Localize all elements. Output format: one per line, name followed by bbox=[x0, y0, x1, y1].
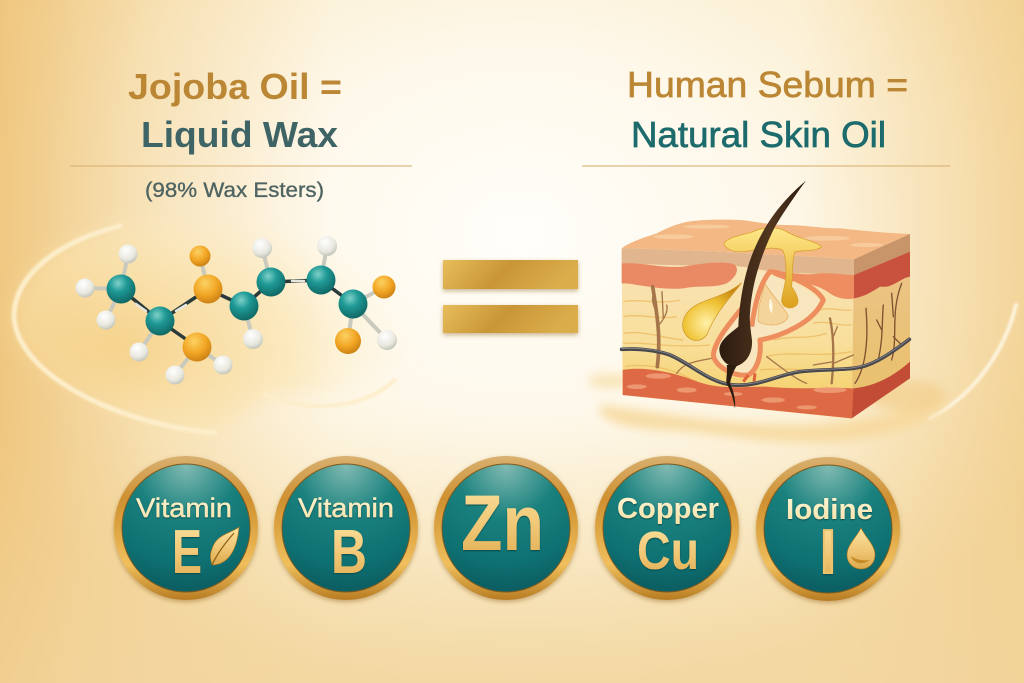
heading: Jojoba Oil: Jojoba Oil = bbox=[128, 66, 342, 107]
divider: left bbox=[70, 165, 412, 167]
epidermis band bbox=[622, 248, 854, 275]
badge: Iodine I bbox=[756, 457, 900, 601]
atoms: carbon bbox=[106, 266, 368, 336]
molecule diagram bbox=[76, 236, 397, 384]
oil puddle and drip bbox=[724, 228, 822, 308]
badge: Iodine I: I bbox=[820, 518, 836, 587]
nerve roots bbox=[653, 287, 853, 383]
heading: Human Sebum: Natural Skin Oil bbox=[631, 114, 886, 155]
red dermal layer right bbox=[770, 271, 854, 299]
subtitle: (98% Wax Esters) bbox=[145, 179, 324, 202]
red dermal layer left bbox=[622, 262, 737, 289]
hair root bbox=[726, 365, 737, 408]
divider: right bbox=[582, 165, 950, 167]
atoms: hydrogen bbox=[76, 236, 397, 384]
heading: Human Sebum: Human Sebum = bbox=[627, 64, 908, 105]
heading: Jojoba Oil bbox=[128, 66, 342, 155]
front face dermis bbox=[622, 248, 854, 418]
skin cross-section bbox=[622, 181, 910, 418]
follicle and oil duct bbox=[713, 270, 820, 375]
badge: Vitamin E: Vitamin bbox=[136, 493, 232, 523]
central gland bbox=[758, 283, 788, 325]
badge: Zn bbox=[434, 456, 578, 600]
lower red layer bbox=[623, 369, 853, 418]
icon: leaf bbox=[210, 527, 239, 565]
badge: Iodine I: Iodine bbox=[786, 494, 873, 526]
hair bbox=[719, 181, 806, 367]
badge: Vitamin E bbox=[114, 456, 258, 600]
swirl: left bbox=[14, 218, 415, 433]
dermis texture lines bbox=[623, 300, 852, 378]
right-face roots bbox=[855, 283, 902, 383]
badge: Vitamin B: Vitamin bbox=[298, 493, 394, 523]
badge: Vitamin E: E bbox=[172, 518, 202, 587]
oil splash under skin block bbox=[588, 374, 945, 442]
heading: Jojoba Oil: Liquid Wax bbox=[141, 114, 338, 155]
right face bbox=[852, 234, 910, 418]
swirl: right bbox=[930, 305, 1016, 418]
vessel line bbox=[622, 339, 909, 385]
atoms: oxygen bbox=[182, 246, 396, 362]
badge: Copper Cu: Copper bbox=[617, 493, 719, 525]
icon: oil drop bbox=[847, 528, 875, 569]
sebaceous gland left bbox=[683, 283, 742, 341]
badge: Copper Cu: Cu bbox=[637, 521, 699, 581]
badge: Zn: Zn bbox=[461, 478, 544, 567]
heading: Human Sebum bbox=[627, 64, 908, 155]
equals sign bbox=[443, 260, 578, 333]
badge: Vitamin B bbox=[274, 456, 418, 600]
top surface bbox=[622, 220, 910, 259]
badge: Vitamin B: B bbox=[331, 518, 367, 587]
badge: Copper Cu bbox=[595, 456, 739, 600]
